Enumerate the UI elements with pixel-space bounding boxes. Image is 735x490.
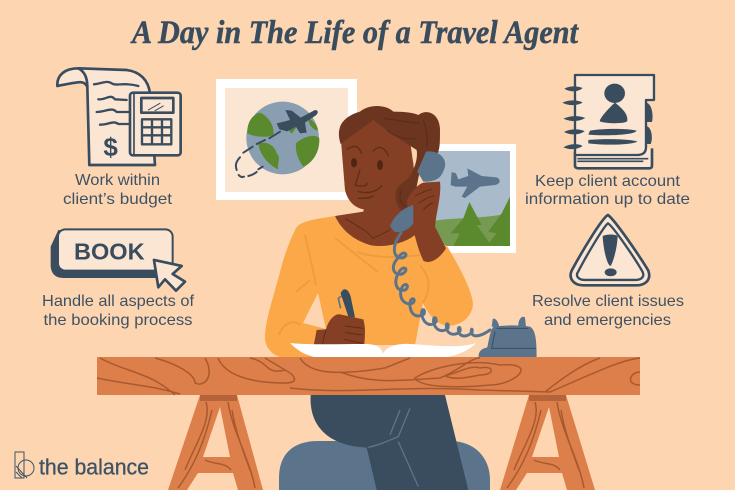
- logo mark: [15, 452, 34, 478]
- globe: [236, 102, 319, 177]
- icon: receipt and calculator: $: [103, 132, 118, 162]
- chair: [279, 441, 490, 490]
- caption: booking: Handle all aspects of: [42, 293, 195, 310]
- caption: booking second line: the booking process: [44, 312, 192, 329]
- framed picture: globe: [216, 79, 357, 200]
- sweater: [265, 216, 473, 357]
- icon: warning triangle: [571, 215, 649, 285]
- caption: budget: Work within: [75, 172, 160, 189]
- writing hand and pen: [313, 289, 365, 348]
- caption: issues: Resolve client issues: [532, 293, 684, 310]
- icon: address book: [562, 75, 654, 168]
- desk trestle right: [500, 395, 595, 490]
- airplane: [277, 110, 318, 133]
- open book on desk: [290, 343, 476, 358]
- caption: issues second line: and emergencies: [544, 312, 671, 329]
- woman: [265, 106, 490, 357]
- telephone base: [479, 317, 537, 357]
- phone handset: [390, 151, 445, 232]
- raised hand: [407, 182, 446, 262]
- logo: the balance: [15, 452, 149, 480]
- caption: budget second line: client’s budget: [63, 191, 173, 208]
- icon: book button with cursor: BOOK: [74, 238, 145, 264]
- icon: receipt and calculator: [57, 68, 181, 165]
- caption: account info: Keep client account: [535, 173, 681, 190]
- icon: book button with cursor: [51, 229, 185, 291]
- trousers: [311, 395, 468, 490]
- desk top: [97, 357, 640, 395]
- airplane: [451, 168, 500, 198]
- logo wordmark: the balance: [39, 454, 149, 480]
- phone cord: [393, 233, 490, 336]
- neck, face and hair: [335, 106, 440, 246]
- title: A Day in The Life of a Travel Agent: [130, 15, 579, 51]
- caption: account info second line: information up to date: [525, 191, 690, 208]
- desk trestle left: [168, 395, 263, 490]
- framed picture: airplane and forest: [425, 144, 516, 253]
